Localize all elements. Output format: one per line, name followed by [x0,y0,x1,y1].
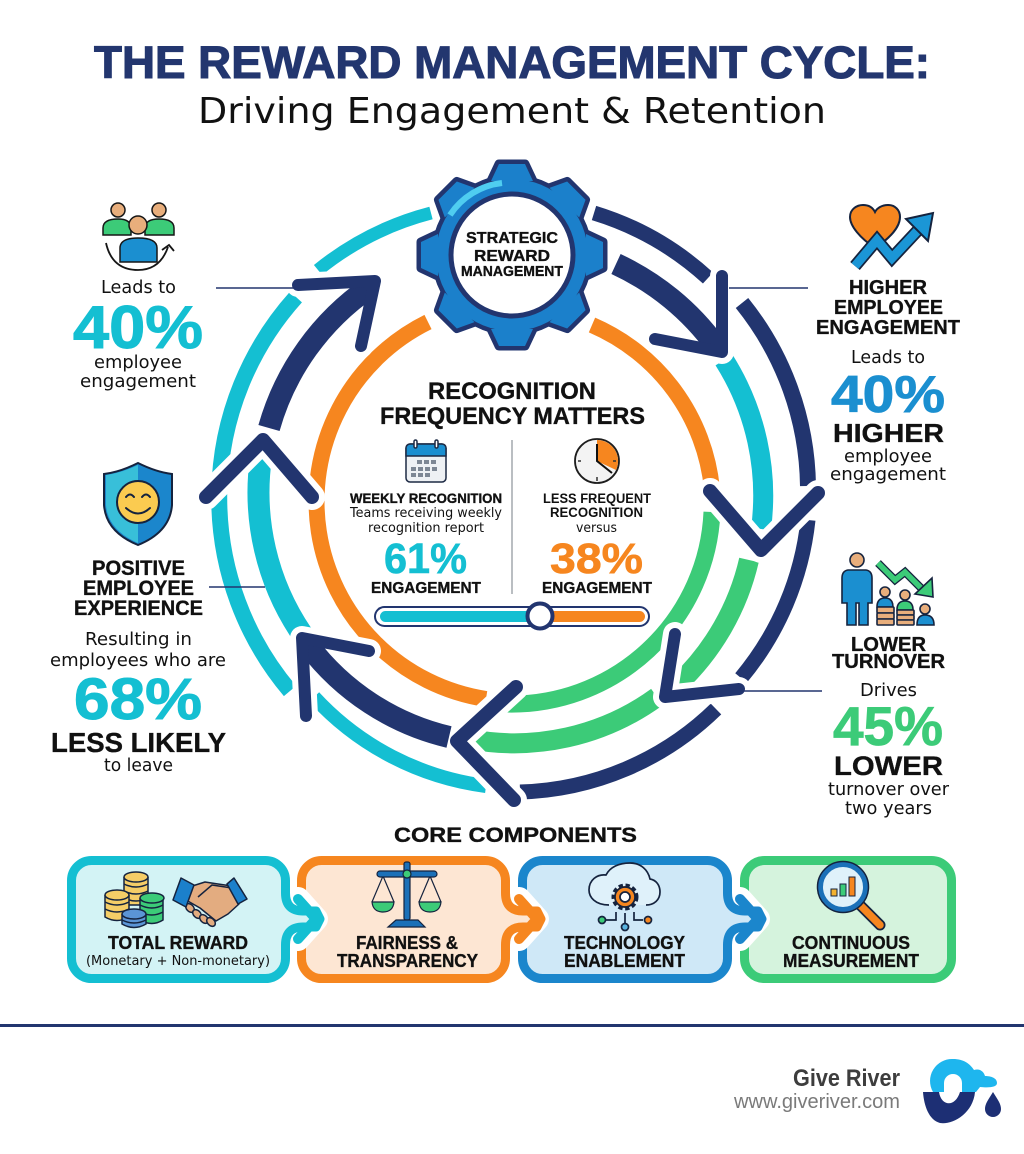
card label [564,933,685,971]
outer ring: navy segments [520,213,808,792]
icon: shield with smile [104,463,172,545]
comparison slider [375,604,649,628]
panel heading [380,378,645,430]
card: continuous measurement [744,860,952,978]
arrow: card 2 to 3 [519,899,537,939]
inner ring: orange [317,322,712,699]
stat text: 40% [73,294,203,361]
arrow: bottom [457,687,516,800]
icon: clock [575,439,619,483]
card label [86,933,270,969]
icon: calendar [406,440,446,482]
stat text: Leads to [101,277,176,298]
heading: EXPERIENCE [74,597,203,620]
icon: people and falling arrow [842,553,934,625]
stat text: employee [844,446,932,467]
text: less frequent recognition: 38% [550,535,643,583]
card: fairness and transparency [302,860,541,978]
arrow: lower left [302,638,449,737]
heading: TURNOVER [832,651,946,673]
outer ring: teal segments [219,213,763,786]
panel: higher employee engagement [816,205,960,485]
stat text: Drives [860,680,917,701]
divider [511,440,513,594]
stat text: turnover over [828,779,950,800]
card label: TOTAL REWARD [108,933,248,953]
footer rule [0,1024,1024,1027]
heading: core components: CORE COMPONENTS [394,823,637,847]
stat text [73,277,203,392]
stat text: employees who are [50,650,226,671]
card label [337,933,478,971]
card: technology enablement [522,860,762,978]
cycle diagram [206,213,822,800]
stat text: LESS LIKELY [51,727,226,758]
heading: EMPLOYEE [834,297,943,319]
icon: balance scale [372,862,441,927]
gear label: REWARD [474,248,550,265]
gear label: MANAGEMENT [461,264,563,280]
title: THE REWARD MANAGEMENT CYCLE: [94,37,930,88]
text: less frequent recognition [542,491,653,597]
panel heading: RECOGNITION [428,378,596,405]
panel: lower turnover [828,553,950,819]
stat text [50,629,226,776]
stat text: HIGHER [833,418,944,448]
icon: coin stacks [105,872,164,928]
inner ring: green [506,512,712,704]
arrow: right chevron [710,491,818,550]
logo: give river [923,1059,1001,1123]
arrow: left chevron [206,440,312,497]
icon: cloud and gear [589,863,660,930]
card label: MEASUREMENT [783,951,919,971]
text: less frequent recognition: ENGAGEMENT [542,580,653,597]
panel: left top engagement [73,203,203,392]
text: weekly recognition: 61% [384,535,467,583]
stat text: engagement [80,371,196,392]
icon: people [103,203,174,270]
icon: handshake [173,878,247,928]
heading [74,557,203,620]
arrow: upper left [269,281,375,428]
card label [783,933,919,971]
heading: ENGAGEMENT [816,317,960,339]
heading [816,277,960,339]
icon: heart and rising arrow [850,205,933,266]
stat text: employee [94,352,182,373]
arrow: top right [616,264,722,352]
heading: LOWER [851,634,927,656]
heading: POSITIVE [92,557,185,580]
stat text: Leads to [851,347,925,368]
heading: EMPLOYEE [83,577,194,600]
stat text: 68% [74,667,202,732]
panel heading: FREQUENCY MATTERS [380,403,645,430]
text: weekly recognition: Teams receiving weekly [349,506,502,521]
stat text: 40% [831,366,945,424]
stat text [828,680,950,819]
gear: strategic reward management [421,164,603,346]
footer brand text [733,1065,900,1113]
text: weekly recognition: WEEKLY RECOGNITION [350,491,502,506]
card label: CONTINUOUS [792,933,910,953]
footer brand text: www.giveriver.com [733,1091,900,1113]
heading [832,634,946,673]
arrow: card 3 to 4 [740,899,758,939]
stat text [830,347,946,485]
text: weekly recognition [349,491,502,597]
outer ring: green segment [469,560,749,743]
stat text: to leave [104,755,173,776]
stat text: Resulting in [85,629,192,650]
text: less frequent recognition: versus [576,521,617,536]
panel: positive employee experience [50,463,226,776]
title [94,37,930,132]
text: weekly recognition: ENGAGEMENT [371,580,482,597]
card label: FAIRNESS & [356,933,458,953]
gear label [461,230,563,280]
card label: (Monetary + Non-monetary) [86,954,270,969]
footer brand text: Give River [793,1065,900,1092]
icon: magnifier [818,862,880,925]
arrow: lower right [665,634,739,697]
text: less frequent recognition: LESS FREQUENT [543,491,652,506]
panel: recognition frequency [349,378,653,628]
card: total reward [72,860,320,978]
stat text: two years [845,798,932,819]
subtitle: Driving Engagement & Retention [198,91,826,132]
stat text: LOWER [834,751,943,781]
arrow: card 1 to 2 [298,899,316,939]
card label: ENABLEMENT [564,951,685,971]
stat text: 45% [833,695,943,757]
core components row [72,860,952,978]
card label: TECHNOLOGY [564,933,685,953]
gear label: STRATEGIC [466,230,558,247]
stat text: engagement [830,464,946,485]
card label: TRANSPARENCY [337,951,478,971]
text: weekly recognition: recognition report [368,521,484,536]
text: less frequent recognition: RECOGNITION [550,505,643,520]
heading: HIGHER [849,277,928,299]
connector lines [209,288,822,691]
